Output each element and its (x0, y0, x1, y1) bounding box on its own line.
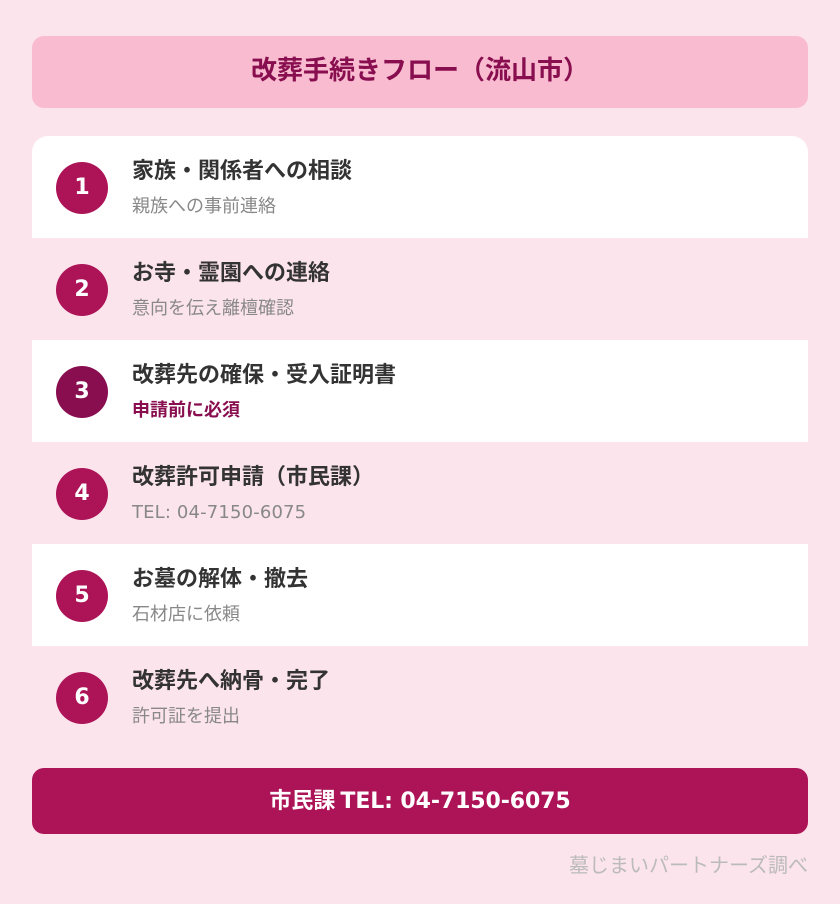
step 3 heading: 改葬先の確保・受入証明書 (132, 357, 396, 389)
step 5 heading: お墓の解体・撤去 (132, 561, 308, 593)
step 2 number: 2 (74, 277, 90, 302)
step 1 number: 1 (74, 175, 90, 200)
step 6 heading: 改葬先へ納骨・完了 (132, 663, 330, 695)
contact bar (32, 768, 808, 834)
step 1 number (56, 162, 108, 214)
step 3 number: 3 (74, 379, 90, 404)
step 5 number: 5 (74, 583, 90, 608)
step 4 detail: TEL: 04-7150-6075 (132, 502, 306, 523)
step 6 detail: 許可証を提出 (132, 702, 240, 728)
step 4 heading: 改葬許可申請（市民課） (132, 459, 374, 491)
step 5 detail: 石材店に依頼 (132, 600, 240, 626)
step 4 number: 4 (74, 481, 90, 506)
contact bar: 市民課 TEL: 04-7150-6075 (269, 783, 571, 815)
source note: 墓じまいパートナーズ調べ (569, 849, 808, 878)
step 1 heading: 家族・関係者への相談 (132, 153, 352, 185)
step 4 (56, 459, 374, 523)
title (32, 36, 808, 108)
step 1 detail: 親族への事前連絡 (132, 192, 276, 218)
step 6 number (56, 672, 108, 724)
step 3 number (56, 366, 108, 418)
step 1 (32, 136, 808, 238)
step 3 detail: 申請前に必須 (132, 396, 240, 422)
step 4 number (56, 468, 108, 520)
title: 改葬手続きフロー（流山市） (251, 50, 589, 87)
step 2 (56, 255, 330, 320)
step 6 (56, 663, 330, 728)
step 6 number: 6 (74, 685, 90, 710)
step 2 heading: お寺・霊園への連絡 (132, 255, 330, 287)
step 5 number (56, 570, 108, 622)
step 5 (32, 544, 808, 646)
step 2 number (56, 264, 108, 316)
step 3 (32, 340, 808, 442)
step 2 detail: 意向を伝え離檀確認 (132, 294, 294, 320)
